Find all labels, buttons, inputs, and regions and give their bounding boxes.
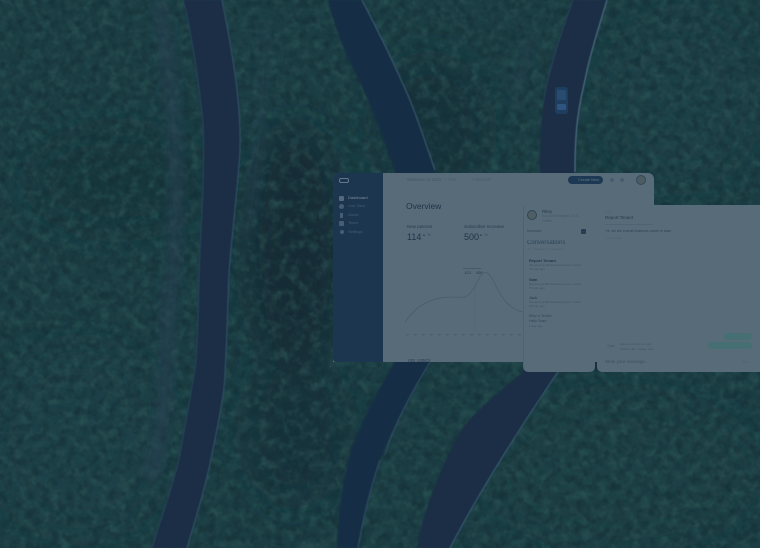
message input: Write your message...: [605, 359, 649, 364]
stat: new patrons: New patrons: [407, 224, 432, 229]
page title: Overview: [406, 201, 441, 211]
chat panel: [597, 205, 760, 372]
top bar icon: settings: [610, 178, 614, 182]
conversation: report tenant: 3 hours ago: [529, 267, 545, 271]
nav: live view: Live View: [348, 203, 365, 208]
send button: Send: [742, 360, 750, 364]
road edge lines: [152, 0, 607, 548]
tooltip labels: [463, 268, 483, 275]
nav: team: Team: [348, 220, 358, 225]
message time: 3 hours ago: [606, 236, 622, 240]
top bar icon: bell: [620, 178, 624, 182]
conversation: report tenant: Report Tenant: [529, 258, 556, 263]
conversation: sam: We are a small business owner in town: [529, 282, 581, 286]
conversation: report tenant: [529, 258, 581, 271]
dashboard window: [333, 173, 654, 362]
nav: dashboard: [339, 195, 368, 201]
conversation: sam: 5 hours ago: [529, 286, 545, 290]
conversation: report tenant group: Riley & Tenant: [529, 314, 552, 318]
conversation: sam: [529, 277, 581, 290]
conversation: jack: 8 hours ago: [529, 304, 545, 308]
nav: team: [339, 220, 358, 226]
logo: [339, 178, 349, 183]
divider: [605, 224, 653, 225]
nav: settings: Settings: [348, 229, 362, 234]
conversation: report tenant group: Hello Team: [529, 319, 546, 323]
conversation: sam: Sam: [529, 277, 537, 282]
conversation: report tenant group: 1 day ago: [529, 324, 542, 328]
top bar text: Welcome to SCS: [407, 177, 441, 182]
typing hint: Attach a file Assign user: [620, 347, 654, 351]
marker line: [474, 283, 476, 331]
outgoing bubble long: [708, 342, 752, 349]
create new button: Create New: [578, 177, 599, 182]
gravel road verges: [150, 0, 535, 480]
shaded gap between panels: [595, 362, 597, 372]
stat: new patrons: ▲ %: [422, 232, 431, 237]
conversation: report tenant group: [529, 314, 552, 328]
user avatar: [636, 175, 646, 185]
profile name: Riley: [542, 209, 552, 214]
road: left: [152, 0, 240, 548]
sidebar: [333, 173, 383, 362]
compose badge: [581, 229, 586, 234]
profile detail: Account Manager, SCS: [542, 214, 578, 218]
stat: subscriber increase: Subscriber Increase: [464, 224, 504, 229]
trend curve: [405, 273, 523, 322]
road: centre: [328, 0, 435, 548]
chat title: Report Tenant: [605, 215, 633, 220]
conversation: jack: [529, 295, 581, 308]
incoming message: Hi, we are a small business owner in town: [606, 229, 671, 233]
stat: subscriber increase: 500: [464, 232, 479, 242]
line chart: [405, 268, 523, 336]
section heading: Conversations: [527, 240, 565, 246]
conversation: jack: Jack: [529, 295, 537, 300]
typing hint: Type: [607, 344, 615, 348]
chat eyebrow: Chat: [605, 210, 611, 214]
typing hint: [607, 342, 654, 351]
road: right with car: [417, 0, 607, 548]
stat: new patrons: [407, 224, 432, 242]
nav: guide: Guide: [348, 212, 359, 217]
top bar filter: network: • Network: [472, 177, 491, 182]
typing hint: Add a comment or note: [620, 342, 651, 346]
stat: subscriber increase: ▲ %: [479, 232, 488, 237]
tooltip labels: 456: [476, 270, 483, 275]
stat: new patrons: 114: [407, 232, 421, 242]
nav: live view: [339, 203, 365, 209]
filter label: Inbound: [527, 228, 541, 233]
stat: subscriber increase: [464, 224, 504, 242]
top bar filter: year: • Year: [445, 177, 457, 182]
profile status: Online: [542, 219, 552, 223]
profile avatar: [527, 210, 537, 220]
tooltip labels: 123: [464, 270, 471, 275]
car: [555, 87, 568, 114]
x axis labels: [406, 334, 521, 335]
nav: dashboard: Dashboard: [348, 195, 368, 200]
conversation: jack: We are a small business owner in town: [529, 300, 581, 304]
filter tabs: All Unassigned Assigned: [527, 247, 563, 251]
conversation: report tenant: We are a small business owner in town: [529, 263, 581, 267]
outgoing bubble short: [724, 333, 752, 340]
create new button: [568, 176, 603, 184]
conversations panel: [523, 205, 595, 372]
